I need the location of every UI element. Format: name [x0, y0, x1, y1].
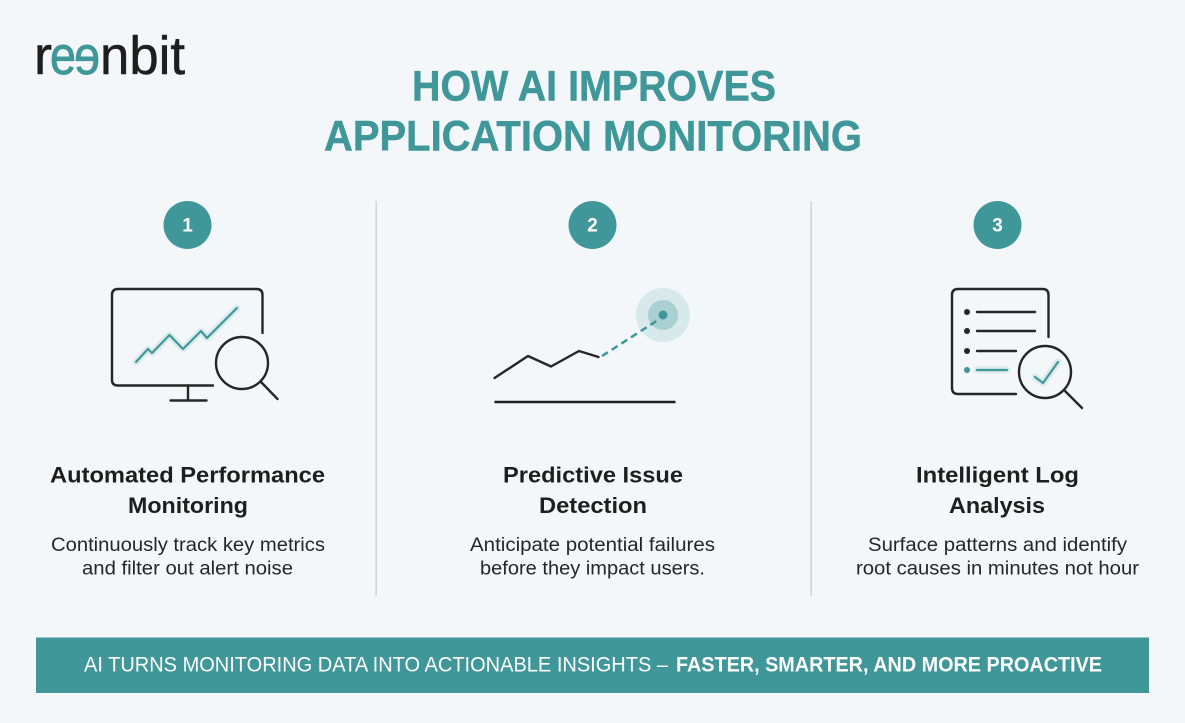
panel: automated performance monitoring [50, 201, 325, 580]
icon: document with magnifier and check [952, 289, 1082, 408]
logo: reenbit: r [34, 26, 52, 86]
panel: intelligent log analysis [856, 201, 1140, 580]
description: before they impact users. [480, 558, 705, 580]
number badge 1: 1 [182, 216, 193, 236]
heading [916, 462, 1079, 518]
description [856, 535, 1140, 580]
description: Anticipate potential failures [470, 535, 715, 556]
heading: Analysis [949, 493, 1045, 518]
title [324, 63, 862, 161]
banner: AI TURNS MONITORING DATA INTO ACTIONABLE INSIGHTS – [84, 654, 668, 677]
description [51, 535, 325, 580]
icon: trend line with predicted point [494, 288, 690, 402]
logo: reenbit: e [50, 26, 76, 86]
banner [36, 638, 1149, 693]
title: APPLICATION MONITORING [324, 113, 862, 161]
description: Continuously track key metrics [51, 535, 325, 556]
description [470, 535, 715, 580]
heading: Monitoring [128, 493, 248, 518]
number badge 2 [568, 201, 616, 249]
description: and filter out alert noise [82, 558, 293, 580]
number badge 3 [974, 201, 1022, 249]
panel: predictive issue detection [470, 201, 715, 580]
heading: Predictive Issue [503, 462, 683, 487]
number badge 1 [164, 201, 212, 249]
banner: FASTER, SMARTER, AND MORE PROACTIVE [676, 654, 1102, 677]
logo: reenbit [34, 26, 185, 86]
heading [503, 462, 683, 518]
title: HOW AI IMPROVES [412, 63, 776, 111]
number badge 3: 3 [992, 216, 1003, 236]
logo: reenbit: nbit [100, 26, 185, 86]
number badge 2: 2 [587, 216, 598, 236]
icon: monitor with magnifier [112, 289, 278, 400]
heading: Intelligent Log [916, 462, 1079, 487]
heading [50, 462, 325, 518]
description: Surface patterns and identify [868, 535, 1128, 556]
heading: Detection [539, 493, 647, 518]
description: root causes in minutes not hour [856, 558, 1140, 580]
logo: reenbit: e [74, 26, 100, 86]
heading: Automated Performance [50, 462, 325, 487]
